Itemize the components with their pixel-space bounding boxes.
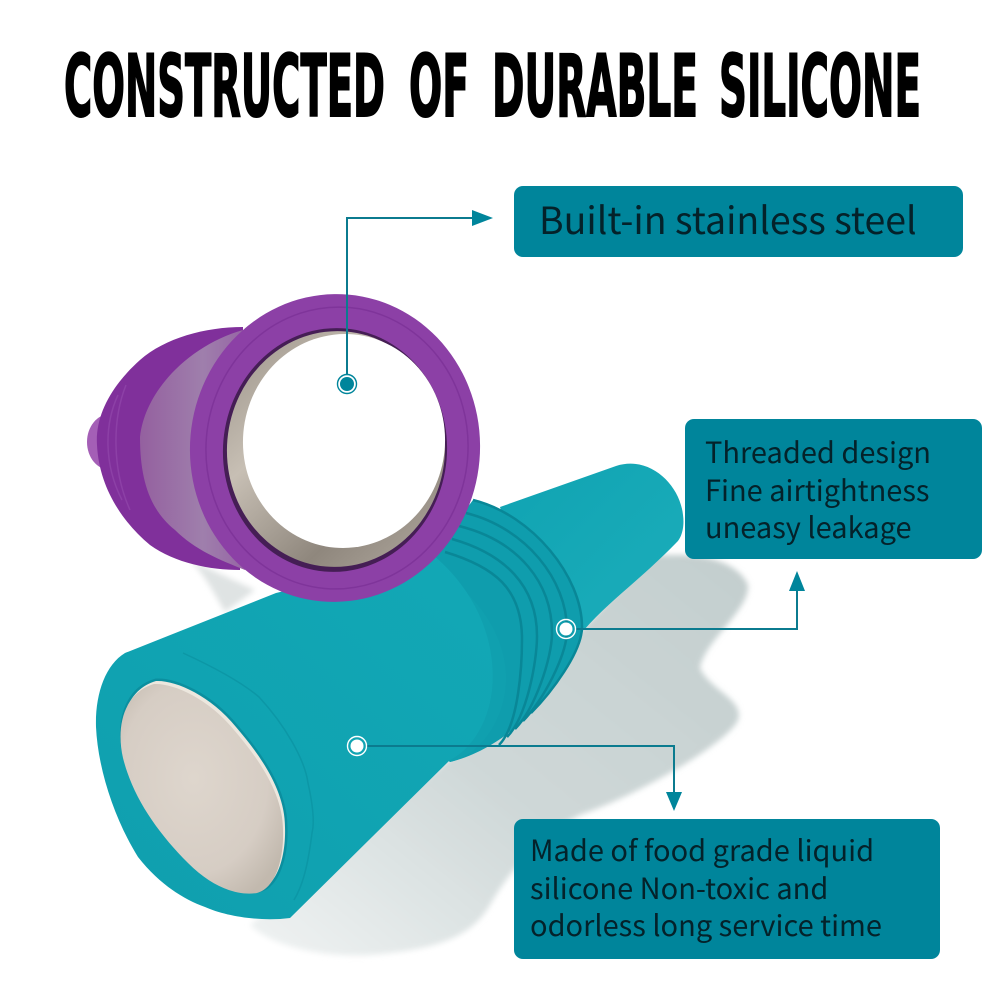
callout: built-in stainless steel: Built-in stainless steel xyxy=(539,190,917,245)
dark inner gap xyxy=(213,319,457,581)
magnet edge xyxy=(123,681,285,891)
arrow: threaded design xyxy=(789,571,805,591)
callout: line to stainless steel xyxy=(347,218,474,375)
threaded neck xyxy=(420,500,582,762)
callout: food grade silicone xyxy=(514,819,940,959)
flange ridges xyxy=(108,385,130,510)
magnet disc xyxy=(123,681,285,891)
callout: threaded design: Threaded design xyxy=(705,430,931,472)
purple rim xyxy=(177,282,493,614)
purple flange xyxy=(97,327,243,570)
callout: line to threaded design xyxy=(575,590,797,629)
callout: built-in stainless steel xyxy=(514,186,963,257)
callout: line to food grade xyxy=(366,746,674,794)
callout: food grade silicone: silicone Non-toxic and xyxy=(530,866,828,908)
arrow: stainless steel xyxy=(472,210,493,226)
purple neck xyxy=(140,330,280,570)
title: OF xyxy=(409,37,469,137)
callout: food grade silicone: Made of food grade liquid xyxy=(530,828,874,870)
callout: food grade silicone: odorless long service time xyxy=(530,903,882,945)
callout: threaded design: Fine airtightness xyxy=(705,468,930,510)
rim line xyxy=(183,653,313,900)
tapered tip xyxy=(500,464,683,640)
title: DURABLE xyxy=(492,37,698,137)
purple stopper back xyxy=(87,327,280,570)
teal stopper xyxy=(96,464,683,919)
title: CONSTRUCTED xyxy=(64,37,385,137)
purple tip xyxy=(87,414,133,470)
callout: threaded design xyxy=(685,419,982,559)
white steel disc xyxy=(234,326,454,556)
dot: threaded design xyxy=(556,620,576,638)
teal collar xyxy=(420,565,506,762)
callout: threaded design: uneasy leakage xyxy=(705,505,912,547)
shadow on the table xyxy=(190,555,748,955)
teal main body xyxy=(96,555,493,919)
arrow: food grade xyxy=(666,792,682,811)
steel ring xyxy=(217,322,455,576)
dot: stainless steel xyxy=(338,374,356,394)
dot: food grade xyxy=(348,736,366,756)
